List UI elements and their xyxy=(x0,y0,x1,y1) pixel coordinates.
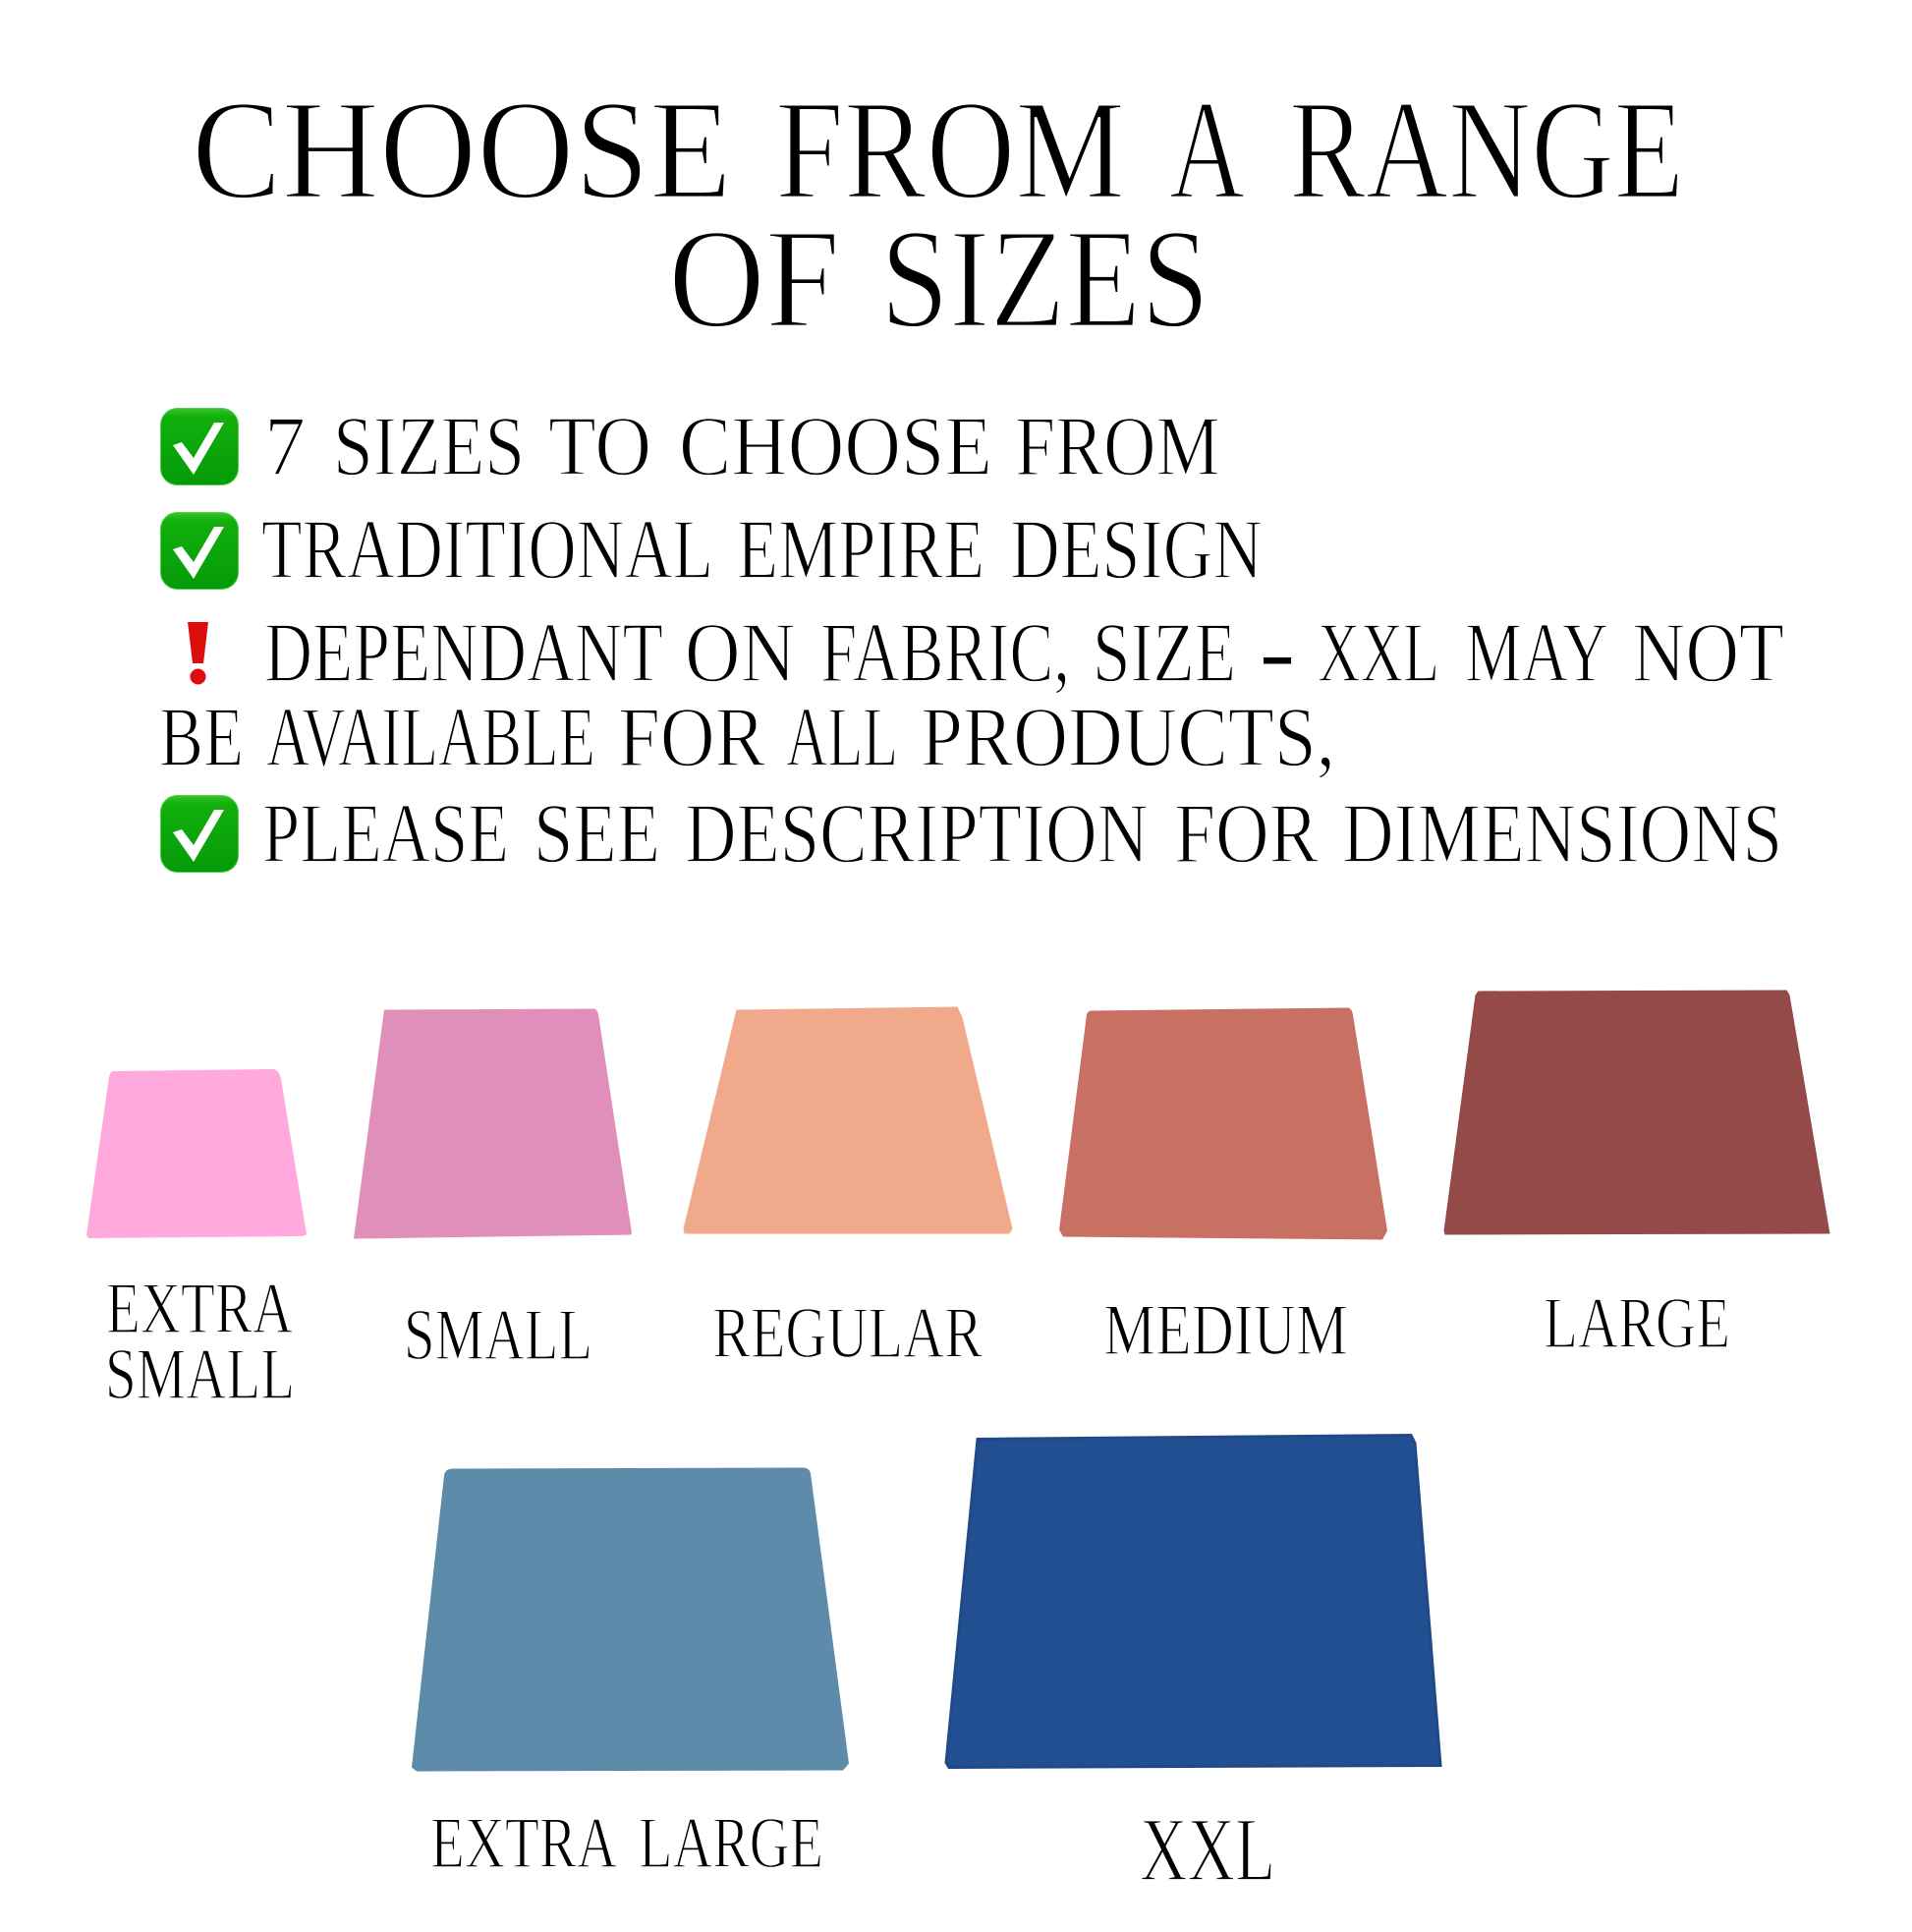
bullet text: please see description: PLEASE xyxy=(262,785,509,881)
icon: green check 2 xyxy=(161,513,238,590)
bullet text: please see description xyxy=(262,785,1782,881)
label: small: SMALL xyxy=(404,1295,592,1376)
bullet text: 7 sizes: SIZES xyxy=(333,398,525,493)
bullet text: dependant on fabric: DEPENDANT xyxy=(264,604,663,700)
icon: green check 1 xyxy=(161,409,238,485)
title: RANGE xyxy=(1289,72,1684,229)
bullet text: dependant on fabric: FABRIC, xyxy=(820,604,1070,700)
shade: medium xyxy=(1059,1008,1387,1240)
label: xxl: XXL xyxy=(1140,1799,1275,1900)
bullet text: traditional empire design: EMPIRE xyxy=(737,501,984,597)
bullet text: dependant on fabric: ON xyxy=(685,604,796,700)
feature list xyxy=(159,398,1784,881)
size: regular xyxy=(684,1006,1012,1374)
bullet text: please see description: DESCRIPTION xyxy=(685,785,1149,881)
bullet text: be available: FOR xyxy=(618,689,765,784)
shade: extra small xyxy=(86,1069,307,1238)
bullet text: be available: PRODUCTS, xyxy=(921,689,1335,784)
shade: regular xyxy=(684,1006,1012,1234)
bullet text: be available: ALL xyxy=(786,689,898,784)
title: FROM xyxy=(775,72,1125,229)
size: medium xyxy=(1059,1008,1387,1371)
icon: red exclamation xyxy=(188,622,208,684)
icon: green check 3 xyxy=(161,796,238,873)
label: medium: MEDIUM xyxy=(1103,1290,1348,1371)
title: SIZES xyxy=(880,200,1209,358)
shade: extra large xyxy=(412,1468,849,1771)
bullet text: traditional empire design: TRADITIONAL xyxy=(261,501,713,597)
bullet text: 7 sizes xyxy=(264,398,1220,493)
bullet text: 7 sizes: 7 xyxy=(264,398,306,493)
label: extra large: EXTRA xyxy=(430,1803,617,1884)
size: extra large xyxy=(412,1468,849,1884)
size: extra small xyxy=(86,1069,307,1415)
bullet text: be available: BE xyxy=(159,689,244,784)
bullet text: 7 sizes: FROM xyxy=(1015,398,1220,493)
label: regular: REGULAR xyxy=(712,1293,983,1374)
size: large xyxy=(1444,991,1829,1364)
bullet text: traditional empire design: DESIGN xyxy=(1010,501,1263,597)
label: large: LARGE xyxy=(1544,1283,1730,1364)
bullet text: dependant on fabric: NOT xyxy=(1632,604,1784,700)
label: extra large: LARGE xyxy=(639,1803,823,1884)
bullet text: dependant on fabric: SIZE xyxy=(1093,604,1236,700)
size: small xyxy=(354,1008,632,1376)
label: extra small: EXTRA xyxy=(106,1269,293,1349)
bullet text: dependant on fabric: MAY xyxy=(1465,604,1608,700)
size: xxl xyxy=(946,1435,1440,1900)
bullet text: please see description: SEE xyxy=(534,785,660,881)
shade: xxl xyxy=(946,1435,1440,1767)
title: CHOOSE xyxy=(192,72,732,229)
label: extra small xyxy=(105,1269,295,1415)
bullet text: 7 sizes: CHOOSE xyxy=(679,398,992,493)
bullet text: traditional empire design xyxy=(261,501,1263,597)
bullet text: be available: AVAILABLE xyxy=(266,689,595,784)
bullet text: dependant on fabric: XXL xyxy=(1318,604,1439,700)
title: OF xyxy=(668,200,840,358)
label: extra small: SMALL xyxy=(105,1335,295,1415)
label: extra large xyxy=(430,1803,823,1884)
shade: large xyxy=(1444,991,1829,1234)
title: A xyxy=(1169,72,1245,229)
bullet text: dependant on fabric xyxy=(264,604,1784,700)
title xyxy=(192,72,1684,358)
bullet text: be available xyxy=(159,689,1335,784)
bullet text: please see description: DIMENSIONS xyxy=(1342,785,1782,881)
bullet text: dependant on fabric: - xyxy=(1260,604,1295,700)
shade: small xyxy=(354,1008,632,1238)
bullet text: 7 sizes: TO xyxy=(548,398,651,493)
bullet text: please see description: FOR xyxy=(1174,785,1319,881)
